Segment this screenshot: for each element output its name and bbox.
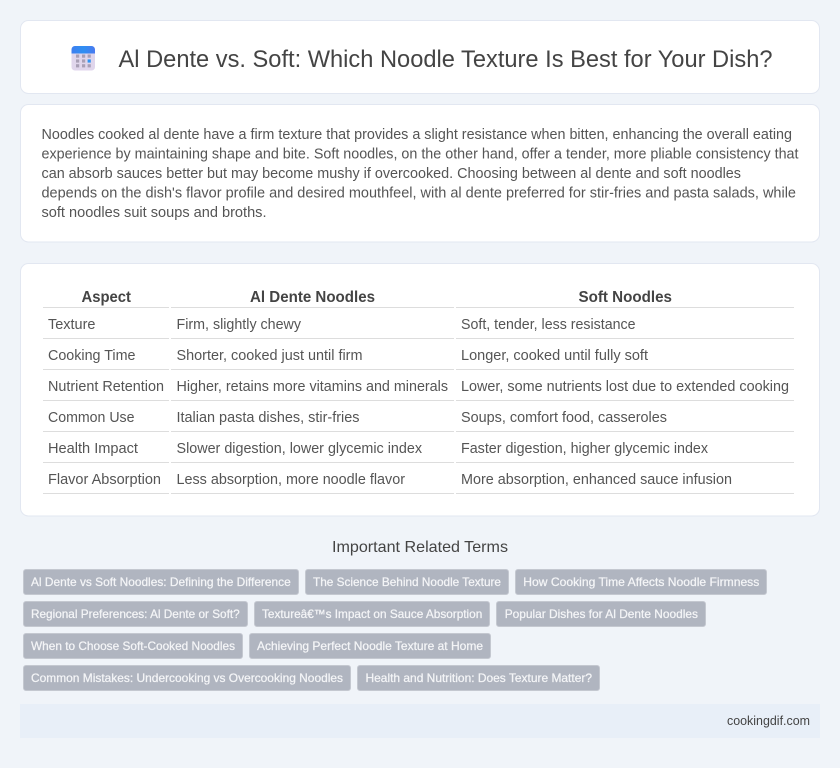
table row: common use: Soups, comfort food, casseroles <box>461 410 667 426</box>
table row: flavor absorption: Flavor Absorption <box>48 472 161 488</box>
chip: The Science Behind Noodle Texture <box>313 575 501 589</box>
table row: health impact: Slower digestion, lower glycemic index <box>176 441 423 457</box>
table header: Aspect <box>82 289 131 306</box>
icon: calendar <box>72 46 95 70</box>
chip: Al Dente vs Soft Noodles: Defining the Difference <box>31 575 291 589</box>
panel: title header <box>20 20 820 94</box>
chip <box>24 666 350 690</box>
chip <box>516 570 766 594</box>
table header: Al Dente Noodles <box>250 289 375 306</box>
chip: Popular Dishes for Al Dente Noodles <box>505 607 698 621</box>
table row: texture: Firm, slightly chewy <box>176 317 302 333</box>
footer source text: cookingdif.com <box>727 713 810 728</box>
chip <box>496 602 706 626</box>
table row: health impact <box>43 441 794 462</box>
chip <box>358 666 600 690</box>
chip <box>24 602 248 626</box>
chip <box>254 602 490 626</box>
table header: Soft Noodles <box>578 289 672 306</box>
table row: texture: Soft, tender, less resistance <box>461 317 636 333</box>
table row: nutrient retention: Higher, retains more vitamins and minerals <box>176 379 448 395</box>
table row: common use: Italian pasta dishes, stir-fries <box>176 410 360 426</box>
text block: intro: can absorb sauces better but may become mushy if overcooked. Choosing between al dente and soft noodles <box>42 166 741 182</box>
table row: common use: Common Use <box>48 410 134 426</box>
table row: nutrient retention: Lower, some nutrients lost due to extended cooking <box>461 379 789 395</box>
chip <box>24 634 242 658</box>
table row: common use <box>43 410 794 432</box>
chip: Common Mistakes: Undercooking vs Overcooking Noodles <box>31 671 343 685</box>
title: Al Dente vs. Soft: Which Noodle Texture Is Best for Your Dish? <box>118 46 772 73</box>
panel: comparison table <box>20 264 820 516</box>
text block: intro <box>42 127 798 221</box>
table row: cooking time <box>43 348 794 370</box>
table row: flavor absorption <box>43 472 794 494</box>
chip <box>306 570 508 594</box>
text block: intro: depends on the dish's flavor profile and desired mouthfeel, with al dente preferred for stir-fries and pasta salads, while <box>42 186 796 202</box>
table row: nutrient retention: Nutrient Retention <box>48 379 164 395</box>
footer <box>20 704 820 738</box>
panel: related term chips <box>24 570 766 690</box>
panel: intro paragraph <box>20 104 820 242</box>
chip <box>24 570 298 594</box>
text block: intro: Noodles cooked al dente have a firm texture that provides a slight resistance when bitten, enhancing the overall eating <box>42 127 792 143</box>
table row: flavor absorption: Less absorption, more noodle flavor <box>176 472 405 488</box>
chip: Textureâ€™s Impact on Sauce Absorption <box>262 607 482 621</box>
table row: health impact: Faster digestion, higher glycemic index <box>461 441 709 457</box>
chip: Achieving Perfect Noodle Texture at Home <box>257 639 483 653</box>
table row: nutrient retention <box>43 379 794 400</box>
text block: intro: experience by maintaining shape and bite. Soft noodles, on the other hand, offer a tender, more pliable consistency that <box>42 146 798 162</box>
text block: intro: soft noodles suit soups and broths. <box>42 205 266 221</box>
table row: texture: Texture <box>48 317 96 333</box>
table header <box>43 289 794 308</box>
table row: cooking time: Longer, cooked until fully soft <box>461 348 648 364</box>
table row: health impact: Health Impact <box>48 441 138 457</box>
chip: Regional Preferences: Al Dente or Soft? <box>31 607 240 621</box>
table row: texture <box>43 317 794 338</box>
table row: cooking time: Cooking Time <box>48 348 136 364</box>
chip: How Cooking Time Affects Noodle Firmness <box>523 575 759 589</box>
chip <box>250 634 490 658</box>
table row: cooking time: Shorter, cooked just until firm <box>176 348 363 364</box>
heading: related terms: Important Related Terms <box>332 539 508 556</box>
table row: flavor absorption: More absorption, enhanced sauce infusion <box>461 472 732 488</box>
chip: When to Choose Soft-Cooked Noodles <box>31 639 235 653</box>
chip: Health and Nutrition: Does Texture Matter? <box>366 671 592 685</box>
